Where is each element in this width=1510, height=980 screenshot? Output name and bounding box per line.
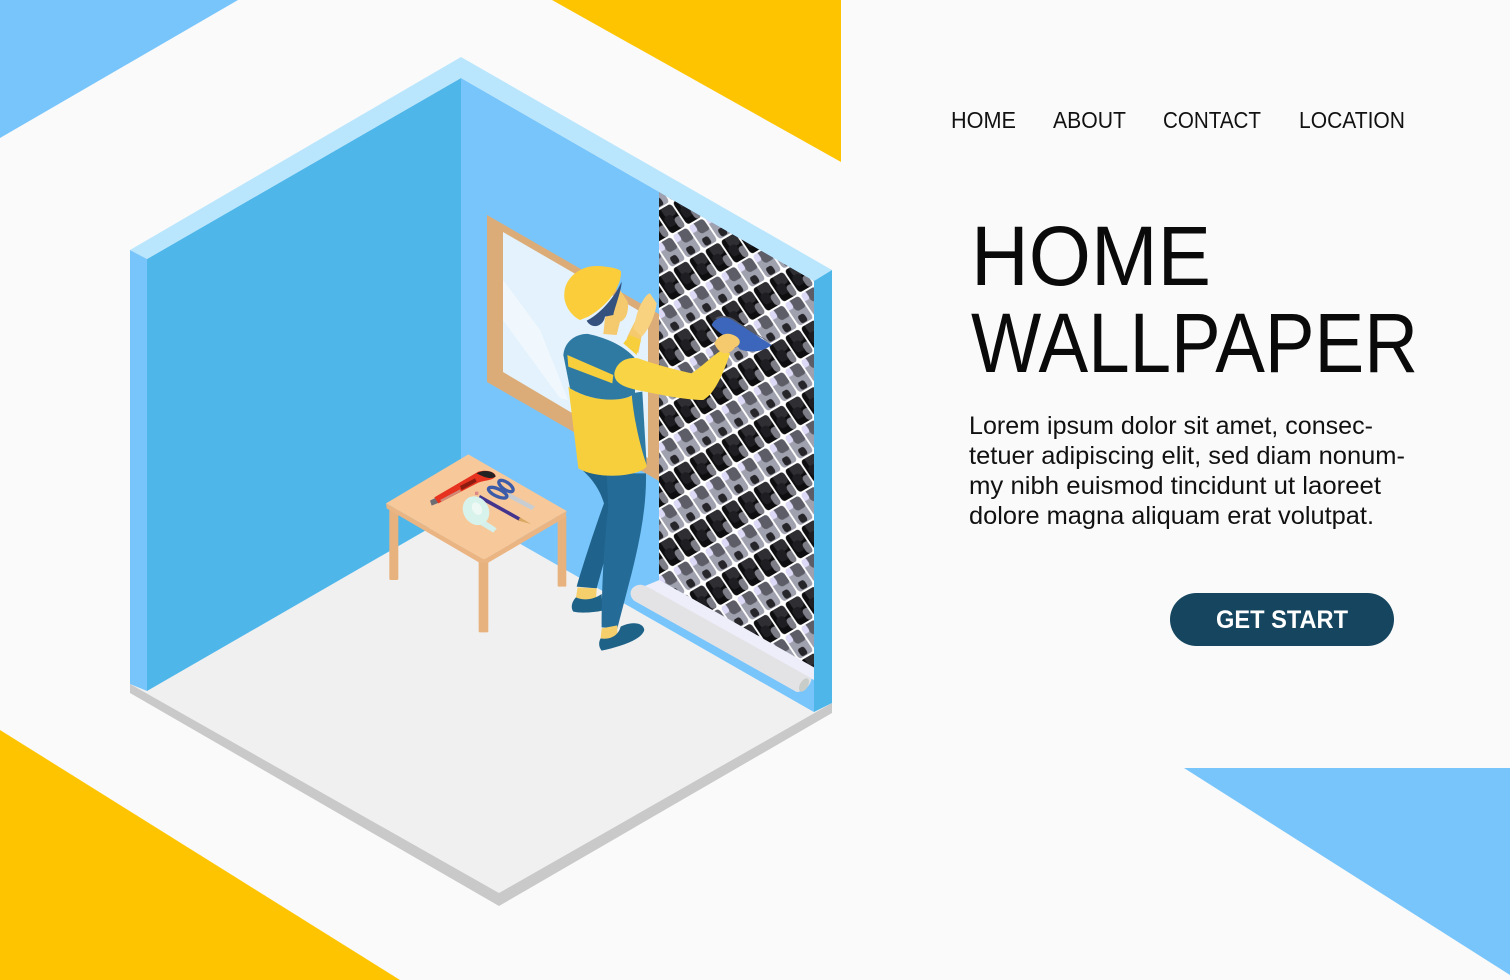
torso lower yellow bbox=[568, 387, 647, 476]
front shoe bbox=[599, 623, 644, 651]
nav: location: LOCATION bbox=[1299, 107, 1405, 133]
back wall bbox=[461, 78, 814, 712]
tools on table bbox=[430, 471, 535, 533]
title: WALLPAPER bbox=[971, 296, 1418, 390]
back leg bbox=[577, 469, 610, 588]
far hand bbox=[633, 293, 657, 337]
far sleeve bbox=[623, 335, 641, 355]
nav: contact: CONTACT bbox=[1163, 107, 1261, 133]
back leg bbox=[558, 515, 566, 587]
window reflection bbox=[503, 280, 568, 400]
scraper shadow bbox=[715, 316, 772, 343]
helmet bbox=[564, 266, 621, 320]
back sock bbox=[576, 587, 597, 600]
title bbox=[971, 209, 1418, 390]
back shoe bbox=[572, 594, 603, 613]
tube end bbox=[797, 677, 811, 693]
background shape: top-left blue bbox=[0, 0, 238, 138]
worker figure bbox=[563, 266, 772, 651]
window glass bbox=[503, 232, 648, 458]
body text: tetuer adipiscing elit, sed diam nonum- bbox=[969, 442, 1405, 470]
far arm bbox=[627, 310, 643, 353]
navigation menu bbox=[951, 107, 1405, 133]
left leg bbox=[389, 508, 398, 580]
background shape: bottom-right blue bbox=[1184, 768, 1510, 975]
body text: Lorem ipsum dolor sit amet, consec- bbox=[969, 412, 1373, 440]
floor edge bbox=[130, 684, 832, 906]
body text: dolore magna aliquam erat volutpat. bbox=[969, 502, 1374, 530]
get start button bbox=[1170, 593, 1394, 646]
right wall end bbox=[814, 270, 832, 712]
near hand bbox=[714, 334, 740, 353]
hair bbox=[587, 282, 622, 326]
unrolled paper bbox=[643, 580, 814, 680]
wallpaper bbox=[624, 192, 814, 712]
left wall bbox=[147, 78, 461, 691]
left wall end bbox=[130, 250, 147, 691]
near arm bbox=[614, 350, 730, 400]
body text: my nibh euismod tincidunt ut laoreet bbox=[969, 472, 1381, 500]
torso side stripe bbox=[632, 392, 647, 465]
tape roll bbox=[458, 491, 497, 533]
wall top cap bbox=[130, 57, 832, 281]
scissors bbox=[487, 478, 535, 510]
floor bbox=[130, 510, 832, 893]
front sock bbox=[601, 625, 617, 639]
table bbox=[386, 454, 567, 632]
cutter knife bbox=[430, 471, 496, 506]
front leg bbox=[479, 558, 488, 632]
pencil bbox=[475, 492, 531, 524]
torso upper blue bbox=[563, 334, 635, 400]
neck and face bbox=[603, 290, 628, 335]
table top bbox=[386, 454, 567, 559]
window bbox=[487, 215, 659, 481]
window frame bbox=[487, 215, 659, 481]
roll shadow bbox=[624, 600, 813, 712]
scraper tool bbox=[712, 318, 772, 351]
paper tube bbox=[631, 585, 812, 692]
background shape: bottom-left yellow bbox=[0, 730, 400, 980]
reflective band bbox=[567, 355, 613, 383]
table edge bbox=[386, 503, 567, 563]
title: HOME bbox=[971, 209, 1211, 303]
wallpaper pattern bbox=[659, 192, 814, 668]
nav: home: HOME bbox=[951, 107, 1016, 133]
body text bbox=[969, 412, 1405, 530]
front leg bbox=[602, 473, 646, 628]
paper roll bbox=[624, 580, 814, 712]
get start button: GET START bbox=[1216, 606, 1348, 634]
background shape: top yellow bbox=[552, 0, 841, 162]
isometric room bbox=[130, 57, 832, 906]
nav: about: ABOUT bbox=[1053, 107, 1126, 133]
legs and shoes bbox=[572, 469, 646, 651]
